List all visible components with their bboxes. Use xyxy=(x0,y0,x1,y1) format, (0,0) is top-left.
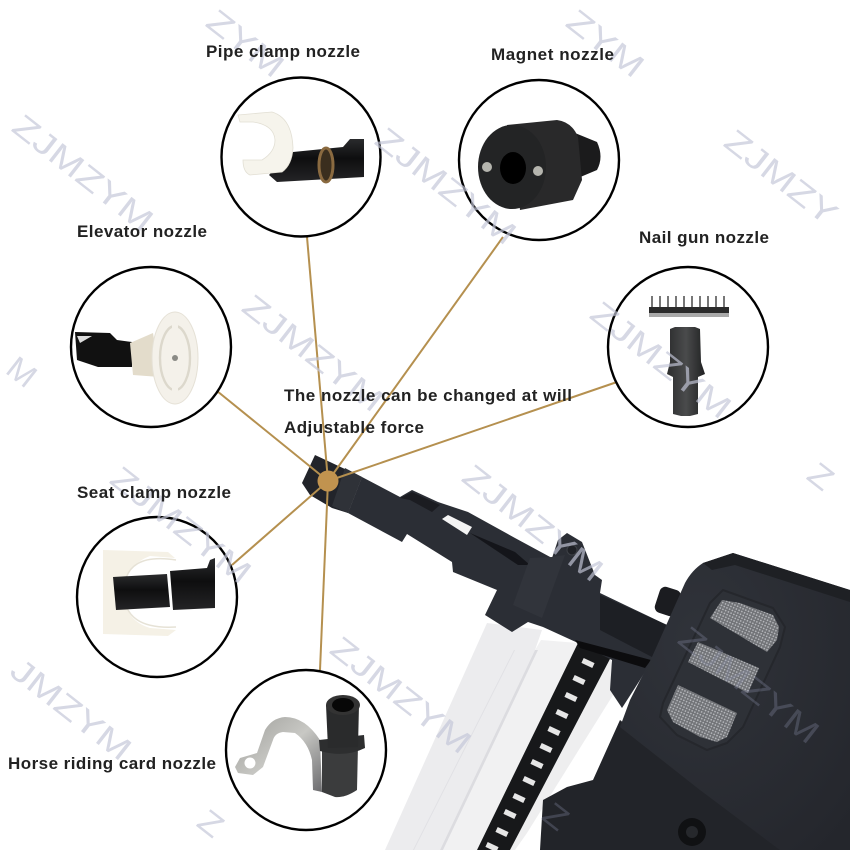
heading: the nozzle can be changed at will: The nozzle can be changed at will xyxy=(284,386,572,405)
watermarks: ZJMZYM xyxy=(456,457,610,589)
watermarks: ZJMZYM xyxy=(104,459,258,591)
watermarks: Z xyxy=(536,795,576,838)
vent mesh 2 xyxy=(688,642,759,693)
watermarks: ZJMZYM xyxy=(6,107,160,239)
watermarks: ZJMZYM xyxy=(369,120,523,252)
watermarks: ZJMZYM xyxy=(324,629,478,761)
gun barrel and driver housing xyxy=(348,477,667,708)
circle: magnet nozzle xyxy=(459,80,619,240)
heading: adjustable force: Adjustable force xyxy=(284,418,424,437)
vent mesh 3 xyxy=(667,685,737,742)
nail feed strip xyxy=(477,643,611,850)
vent surround xyxy=(660,590,785,750)
circle: horse riding card nozzle xyxy=(226,670,386,830)
watermarks: ZYM xyxy=(560,2,651,85)
callout hub dot xyxy=(318,470,338,492)
lower handle xyxy=(540,720,800,850)
watermarks: ZJMZYM xyxy=(236,287,390,419)
nail gun photo xyxy=(302,455,850,850)
watermarks: JMZYM xyxy=(4,651,139,768)
vent mesh 1 xyxy=(710,600,779,652)
label: magnet nozzle: Magnet nozzle xyxy=(491,45,614,64)
watermarks: ZJMZYM xyxy=(672,619,826,751)
label: nail gun nozzle: Nail gun nozzle xyxy=(639,228,769,247)
watermarks: M xyxy=(0,349,44,395)
motor body xyxy=(620,553,850,850)
label: seat clamp nozzle: Seat clamp nozzle xyxy=(77,483,231,502)
label: elevator nozzle: Elevator nozzle xyxy=(77,222,207,241)
circle: nail gun nozzle xyxy=(608,267,768,427)
watermarks: ZYM xyxy=(200,2,291,85)
nozzle tip xyxy=(302,455,362,513)
adjustment knob xyxy=(653,585,682,618)
label: pipe clamp nozzle: Pipe clamp nozzle xyxy=(206,42,360,61)
circle: pipe clamp nozzle xyxy=(222,78,380,236)
circle: elevator nozzle xyxy=(71,267,231,427)
watermarks: Z xyxy=(191,802,231,845)
circle: seat clamp nozzle xyxy=(77,517,237,677)
body top rim xyxy=(703,553,850,602)
label: horse riding card nozzle: Horse riding card nozzle xyxy=(8,754,216,773)
watermarks: ZJMZYM xyxy=(584,294,738,426)
callout lines xyxy=(217,237,617,670)
screw xyxy=(678,818,706,846)
watermarks: ZJMZY xyxy=(718,122,845,232)
magazine rail xyxy=(385,623,618,850)
watermarks: Z xyxy=(801,455,841,498)
